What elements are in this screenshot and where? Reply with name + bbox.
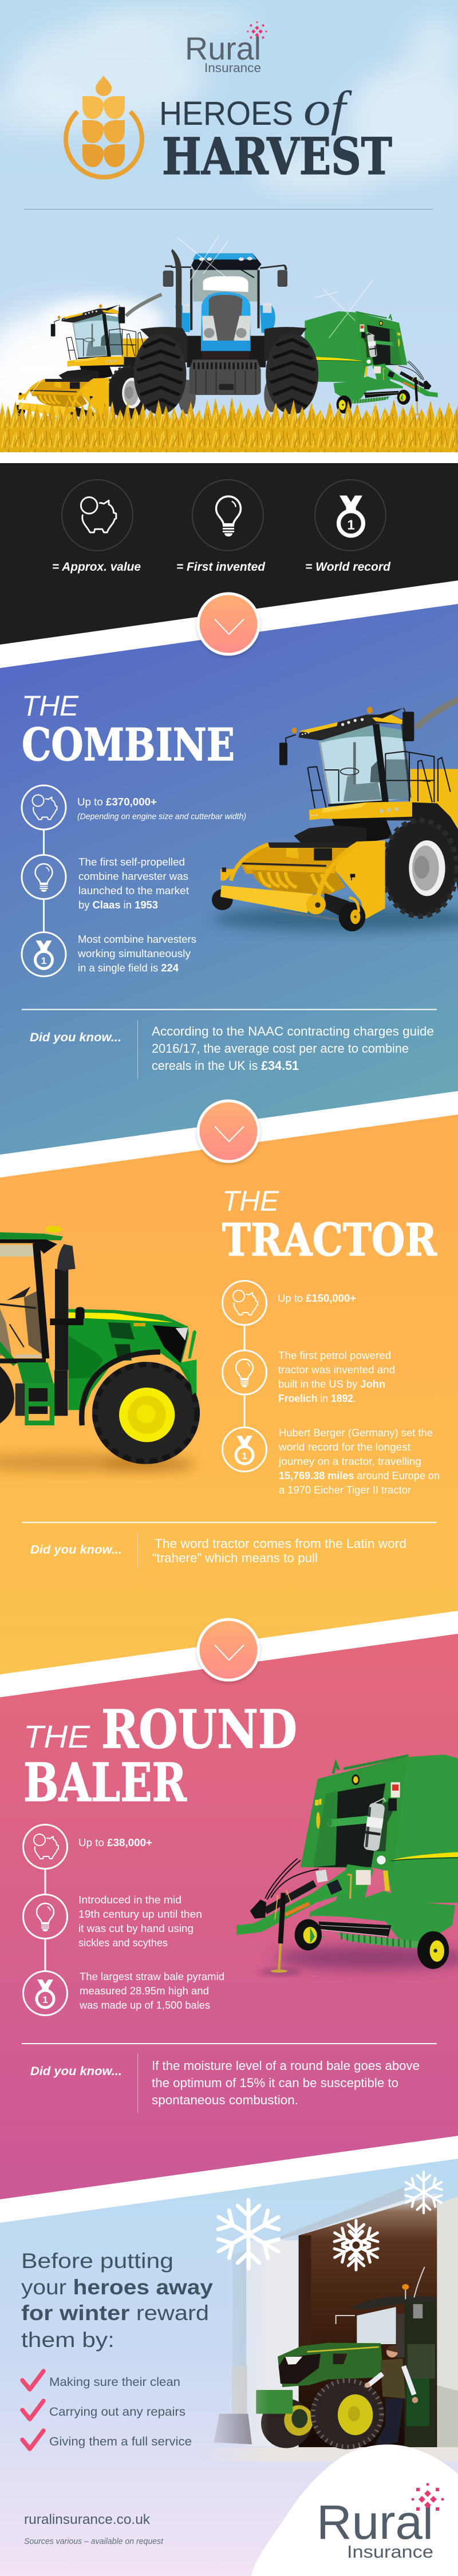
- panel: the round baler: [0, 1634, 458, 2199]
- heading: the combine: THE: [22, 690, 79, 722]
- did you know: baler: spontaneous combustion.: [152, 2093, 298, 2107]
- facts: tractor: tractor was invented and: [278, 1364, 395, 1376]
- facts: tractor: built in the US by John: [278, 1378, 385, 1390]
- snowflake medium: [331, 2221, 381, 2270]
- facts: baler: sickles and scythes: [78, 1937, 168, 1949]
- facts: tractor: [278, 1293, 440, 1496]
- logo: Rural Insurance: [185, 21, 267, 75]
- tractor cab: [163, 249, 287, 333]
- facts: baler: was made up of 1,500 bales: [79, 2000, 210, 2011]
- barn walls: [195, 2187, 458, 2462]
- facts: tractor: journey on a tractor, travelling: [278, 1456, 421, 1467]
- heading: the round baler: BALER: [23, 1752, 187, 1814]
- title: HARVEST: [162, 127, 392, 186]
- timeline: baler: [23, 1825, 68, 2015]
- timeline: baler: 1: [42, 1994, 48, 2005]
- baler ground shadows: [275, 1945, 458, 1970]
- front linkage: [181, 1330, 196, 1395]
- panel: the combine: [0, 604, 458, 1155]
- title: of: [303, 81, 352, 136]
- combine image: [212, 689, 458, 931]
- did you know: combine: Did you know...: [30, 1031, 121, 1044]
- tractor tyres: [134, 327, 318, 414]
- arrow button 3: [198, 1619, 259, 1680]
- website and sources: [24, 2512, 164, 2546]
- did you know: combine: 2016/17, the average cost per acre to combine: [152, 1041, 409, 1056]
- white corner with logo: [251, 2444, 458, 2576]
- did you know: tractor: [30, 1536, 406, 1565]
- baler image: [236, 1755, 458, 1973]
- heading: the tractor: THE: [222, 1185, 279, 1217]
- did you know: baler: If the moisture level of a round bale goes above: [152, 2059, 420, 2073]
- did you know: tractor: “trahere” which means to pull: [152, 1551, 318, 1565]
- facts: baler: Introduced in the mid: [78, 1894, 181, 1906]
- snowflake small: [402, 2172, 445, 2213]
- timeline: tractor: [222, 1281, 267, 1471]
- facts: baler: The largest straw bale pyramid: [80, 1971, 224, 1982]
- hero baler: [304, 311, 438, 415]
- hero tractor: [134, 249, 318, 414]
- facts: combine: launched to the market: [78, 885, 189, 896]
- heading: the combine: COMBINE: [22, 719, 235, 771]
- facts: baler: [78, 1837, 224, 2011]
- did you know: combine: [30, 1024, 434, 1073]
- tractor bonnet: [183, 292, 271, 368]
- did you know: combine: cereals in the UK is £34.51: [152, 1058, 299, 1073]
- website and sources: Sources various – available on request: [24, 2537, 164, 2546]
- wheat field: [0, 397, 458, 452]
- white corner with logo: Rural: [317, 2495, 433, 2549]
- facts: tractor: Up to £150,000+: [278, 1293, 356, 1304]
- photo: tractor in barn: [195, 2187, 458, 2462]
- did you know: baler: Did you know...: [30, 2065, 122, 2078]
- did you know: baler: the optimum of 15% it can be susceptible to: [152, 2076, 398, 2090]
- checklist: Carrying out any repairs: [49, 2405, 185, 2419]
- did you know: combine: According to the NAAC contracting charges guide: [152, 1024, 434, 1038]
- legend: approx value: = Approx. value: [52, 560, 141, 574]
- facts: combine: working simultaneously: [77, 948, 191, 959]
- logo: Rural Insurance: Rural: [185, 30, 261, 66]
- checklist: Making sure their clean: [49, 2376, 180, 2389]
- panel: the tractor: [0, 1115, 458, 1674]
- arrow button 2: [198, 1101, 259, 1161]
- heading: the round baler: ROUND: [101, 1698, 297, 1760]
- heading: before putting: them by:: [21, 2328, 114, 2352]
- heading: before putting: for winter reward: [21, 2301, 209, 2325]
- heading: the tractor: [222, 1185, 437, 1266]
- barn tractor: [256, 2267, 436, 2449]
- timeline: tractor: 1: [242, 1451, 247, 1461]
- timeline: combine: [22, 785, 66, 977]
- logo: Rural Insurance: Insurance: [204, 61, 261, 75]
- did you know: tractor: Did you know...: [30, 1543, 122, 1556]
- sparkles: [0, 236, 373, 418]
- exhaust and mirror: [50, 1244, 85, 1416]
- facts: combine: [77, 796, 246, 974]
- title: [161, 90, 392, 175]
- facts: tractor: 15,769.38 miles around Europe on: [279, 1470, 440, 1481]
- hero combine: [16, 293, 163, 421]
- checklist: Giving them a full service: [49, 2435, 192, 2448]
- checklist: [22, 2371, 192, 2449]
- facts: combine: Most combine harvesters: [78, 934, 196, 945]
- wheat emblem: [66, 76, 142, 177]
- facts: tractor: The first petrol powered: [278, 1350, 391, 1361]
- farmer: [365, 2345, 418, 2444]
- cab: [0, 1226, 63, 1366]
- snowflake large: [214, 2200, 283, 2269]
- panel: winter advice: [0, 2159, 458, 2576]
- facts: baler: 19th century up until then: [78, 1909, 202, 1920]
- tractor ground shadow: [0, 1453, 196, 1472]
- heading: the combine: [22, 690, 235, 771]
- legend panel: [0, 463, 458, 645]
- facts: baler: Up to £38,000+: [78, 1837, 152, 1848]
- heading: before putting: [21, 2249, 213, 2352]
- legend: approx value: [52, 480, 141, 574]
- facts: baler: measured 28.95m high and: [80, 1985, 209, 1997]
- tractor image: [0, 1226, 200, 1464]
- clouds: [0, 6, 458, 421]
- heading: before putting: your heroes away: [21, 2275, 213, 2299]
- heading: the round baler: THE: [23, 1718, 90, 1755]
- front tyre and wheel: [92, 1362, 200, 1464]
- facts: combine: in a single field is 224: [78, 962, 179, 974]
- arrow button 1: [198, 594, 259, 654]
- facts: combine: The first self-propelled: [78, 856, 185, 868]
- facts: tractor: world record for the longest: [278, 1441, 410, 1453]
- legend: first invented: = First invented: [176, 560, 266, 574]
- legend: world record: [305, 480, 391, 574]
- facts: combine: combine harvester was: [78, 871, 188, 882]
- facts: baler: it was cut by hand using: [78, 1923, 194, 1934]
- facts: combine: by Claas in 1953: [78, 899, 158, 911]
- heading: the round baler: [23, 1698, 297, 1814]
- legend: world record: = World record: [305, 560, 391, 574]
- title: HEROES: [159, 95, 293, 132]
- legend: first invented: [176, 480, 266, 574]
- facts: combine: (Depending on engine size and cutterbar width): [77, 812, 246, 821]
- did you know: baler: [30, 2059, 420, 2107]
- timeline: combine: 1: [41, 955, 46, 966]
- hero panel: sky and machines: [0, 0, 458, 452]
- heading: before putting: Before putting: [21, 2249, 173, 2273]
- legend: world record: 1: [347, 517, 355, 533]
- website and sources: ruralinsurance.co.uk: [24, 2512, 151, 2527]
- facts: tractor: Froelich in 1892.: [278, 1393, 356, 1404]
- combine ground shadow: [212, 906, 458, 931]
- front weights: [189, 359, 261, 395]
- facts: combine: Up to £370,000+: [77, 796, 157, 808]
- facts: tractor: Hubert Berger (Germany) set the: [279, 1427, 433, 1439]
- did you know: tractor: The word tractor comes from the Latin word: [155, 1536, 406, 1551]
- steps and rear tyre: [0, 1362, 54, 1425]
- white corner with logo: Insurance: [347, 2542, 433, 2562]
- bonnet: [68, 1309, 196, 1425]
- facts: tractor: a 1970 Eicher Tiger II tractor: [279, 1484, 411, 1496]
